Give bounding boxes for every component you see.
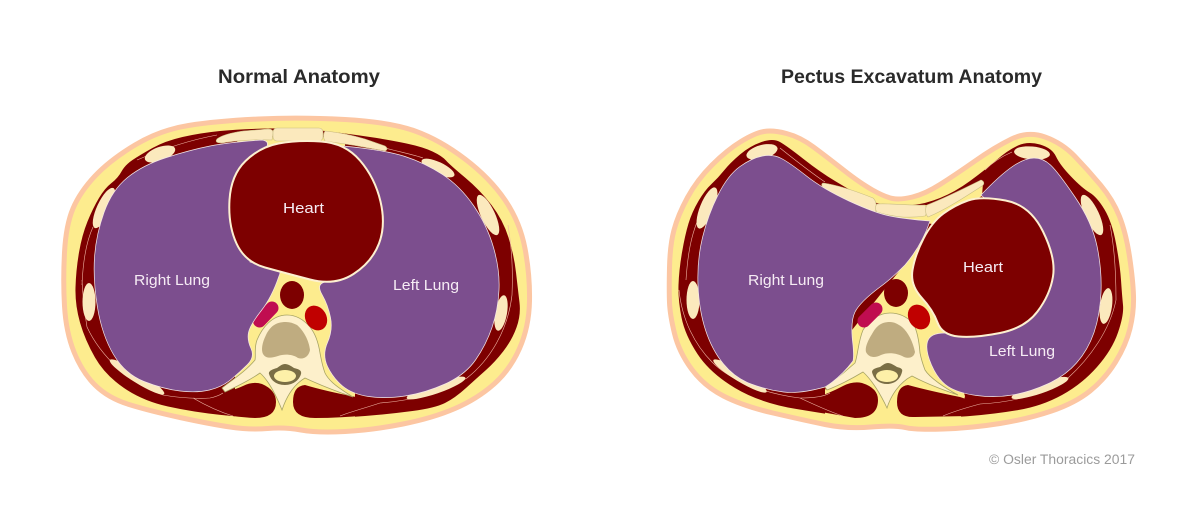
right back muscle	[293, 385, 375, 418]
vertebra	[222, 315, 353, 410]
chest wall muscle	[75, 128, 520, 418]
pink vessel	[260, 308, 272, 321]
pleura lines	[82, 135, 512, 416]
pink vessel	[864, 309, 876, 321]
copyright notice: © Osler Thoracics 2017	[989, 452, 1135, 467]
red vessel	[300, 301, 332, 335]
aorta	[884, 279, 908, 307]
costal cartilage left	[216, 129, 273, 143]
left lung	[927, 158, 1101, 397]
skin and fat layer	[669, 131, 1134, 429]
spinal cord	[876, 370, 898, 382]
right lung	[698, 155, 930, 392]
aorta	[280, 281, 304, 309]
pleura lines	[679, 148, 1116, 416]
heading: normal anatomy: Normal Anatomy	[218, 66, 380, 88]
sternum	[876, 204, 926, 217]
costal cartilage right	[324, 131, 387, 151]
red vessel	[903, 300, 935, 334]
spinal canal	[872, 363, 902, 384]
left back muscle	[205, 383, 276, 418]
label: right lung: Right Lung	[748, 272, 824, 289]
panel: normal anatomy	[64, 66, 530, 432]
mediastinal fat	[235, 137, 355, 422]
label: right lung: Right Lung	[134, 272, 210, 289]
costal cartilage left	[822, 183, 876, 212]
heading: pectus excavatum anatomy: Pectus Excavatum Anatomy	[781, 66, 1042, 88]
left back muscle	[810, 382, 878, 418]
costal cartilage right	[926, 180, 984, 217]
label: left lung: Left Lung	[989, 343, 1055, 360]
sternum	[273, 128, 323, 141]
heart	[229, 141, 383, 282]
ribs	[82, 142, 510, 403]
right back muscle	[897, 385, 975, 417]
vertebral body	[262, 322, 310, 359]
spinal canal	[269, 364, 301, 385]
label: left lung: Left Lung	[393, 277, 459, 294]
mediastinal fat	[825, 245, 965, 422]
retrosternal fat	[875, 183, 983, 224]
label: heart: Heart	[963, 259, 1004, 276]
skin and fat layer	[64, 118, 530, 432]
ribs	[686, 141, 1114, 403]
vertebra	[825, 313, 958, 408]
label: heart: Heart	[283, 200, 325, 217]
right lung	[94, 140, 280, 392]
spinal cord	[274, 370, 296, 382]
heart	[912, 198, 1054, 337]
vertebral body	[866, 322, 915, 358]
chest wall muscle	[678, 140, 1123, 419]
panel: pectus excavatum anatomy	[669, 66, 1134, 429]
left lung	[320, 146, 499, 398]
